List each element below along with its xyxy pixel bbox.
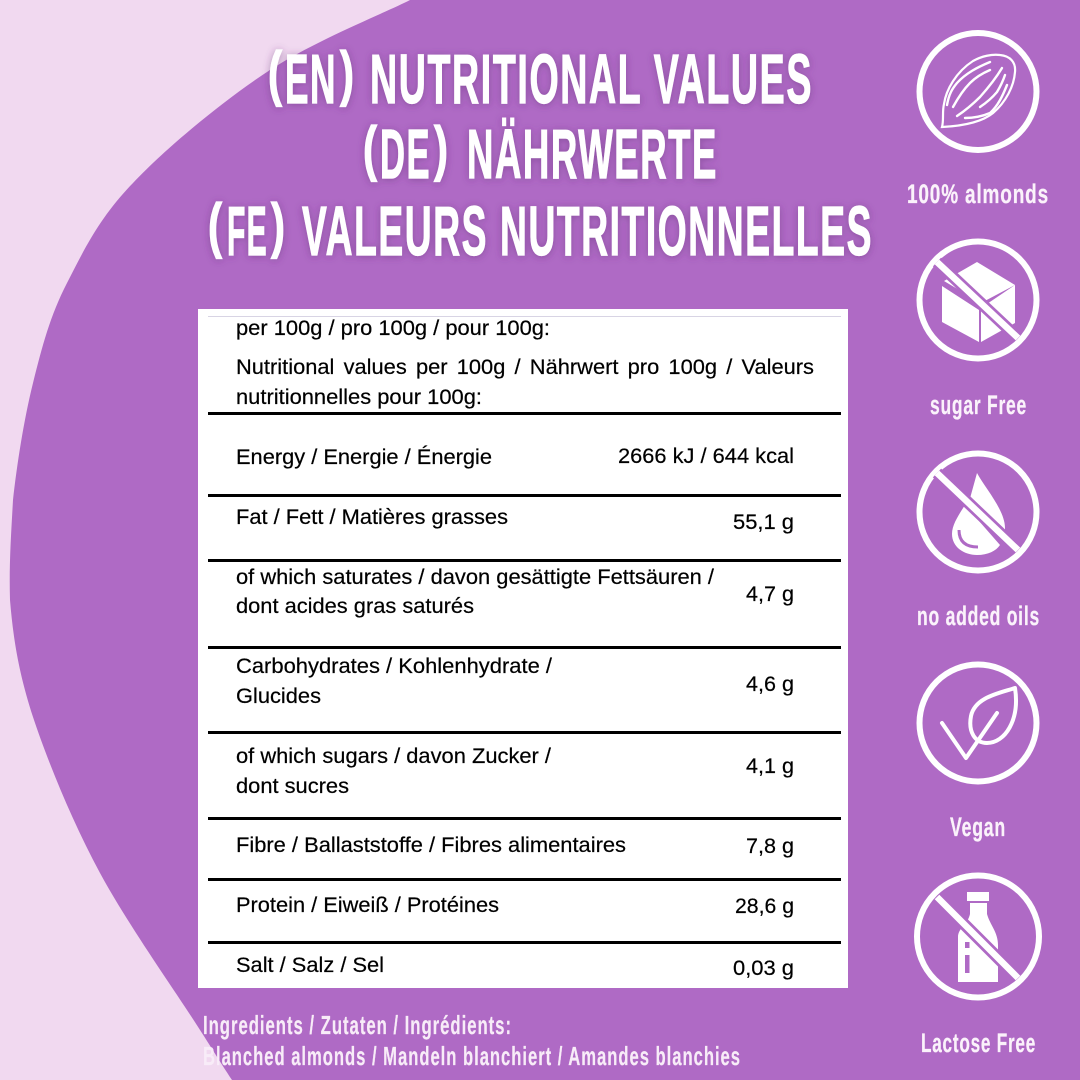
table intro text: Nutritional values per 100g / Nährwert pro 100g / Valeurs: [236, 356, 814, 379]
table intro text: per 100g / pro 100g / pour 100g:: [236, 317, 550, 340]
icon: vegan leaf: [920, 664, 1036, 782]
row: carbohydrates: Glucides: [236, 685, 321, 708]
row: carbohydrates: 4,6 g: [746, 673, 794, 696]
icon: no sugar cube: [920, 242, 1036, 358]
row: saturates: of which saturates / davon gesättigte Fettsäuren /: [236, 566, 714, 589]
row: saturates: dont acides gras saturés: [236, 595, 474, 618]
icon: no added oils: [920, 454, 1036, 570]
title: NÄHRWERTE: [467, 115, 718, 193]
ingredients text: Blanched almonds / Mandeln blanchiert / Amandes blanchies: [203, 1041, 741, 1071]
row: salt: [236, 954, 794, 980]
title: FE: [227, 192, 268, 270]
ingredients text: Ingredients / Zutaten / Ingrédients:: [203, 1010, 512, 1040]
table intro text: nutritionnelles pour 100g:: [236, 386, 482, 409]
row: fibre: [236, 834, 794, 858]
panel: nutrition table: [198, 309, 848, 988]
ingredients text: [203, 1010, 741, 1071]
title: (: [268, 40, 282, 107]
row: fat: [236, 506, 794, 534]
row: energy: Energy / Energie / Énergie: [236, 446, 492, 469]
row: fat: 55,1 g: [733, 511, 794, 534]
title: (: [363, 115, 377, 182]
row: salt: Salt / Salz / Sel: [236, 954, 384, 977]
title: (: [208, 192, 222, 259]
title: ): [434, 115, 448, 182]
row: fibre: 7,8 g: [746, 835, 794, 858]
icon: almond: [920, 33, 1036, 150]
row: carbohydrates: [236, 655, 794, 708]
row: salt: 0,03 g: [733, 957, 794, 980]
row: sugars: of which sugars / davon Zucker /: [236, 745, 551, 768]
table intro text: [236, 317, 814, 409]
title: ): [340, 40, 354, 107]
table row dividers: [208, 412, 841, 944]
title: [208, 31, 873, 270]
row: protein: 28,6 g: [735, 895, 794, 918]
icon: lactose free bottle: [917, 876, 1039, 998]
row: sugars: dont sucres: [236, 775, 349, 798]
row: fat: Fat / Fett / Matières grasses: [236, 506, 508, 529]
row: saturates: 4,7 g: [746, 583, 794, 606]
label: Vegan: Vegan: [950, 812, 1006, 842]
row: carbohydrates: Carbohydrates / Kohlenhydrate /: [236, 655, 552, 678]
row: saturates: [236, 566, 794, 618]
label: sugar Free: sugar Free: [930, 390, 1027, 420]
row: sugars: [236, 745, 794, 798]
row: protein: Protein / Eiweiß / Protéines: [236, 894, 499, 917]
row: sugars: 4,1 g: [746, 755, 794, 778]
row: protein: [236, 894, 794, 918]
row: fibre: Fibre / Ballaststoffe / Fibres alimentaires: [236, 834, 626, 857]
row: energy: [236, 445, 794, 469]
row: energy: 2666 kJ / 644 kcal: [618, 445, 794, 468]
title: ): [271, 192, 285, 259]
title: DE: [380, 115, 431, 193]
title: EN: [285, 40, 337, 118]
